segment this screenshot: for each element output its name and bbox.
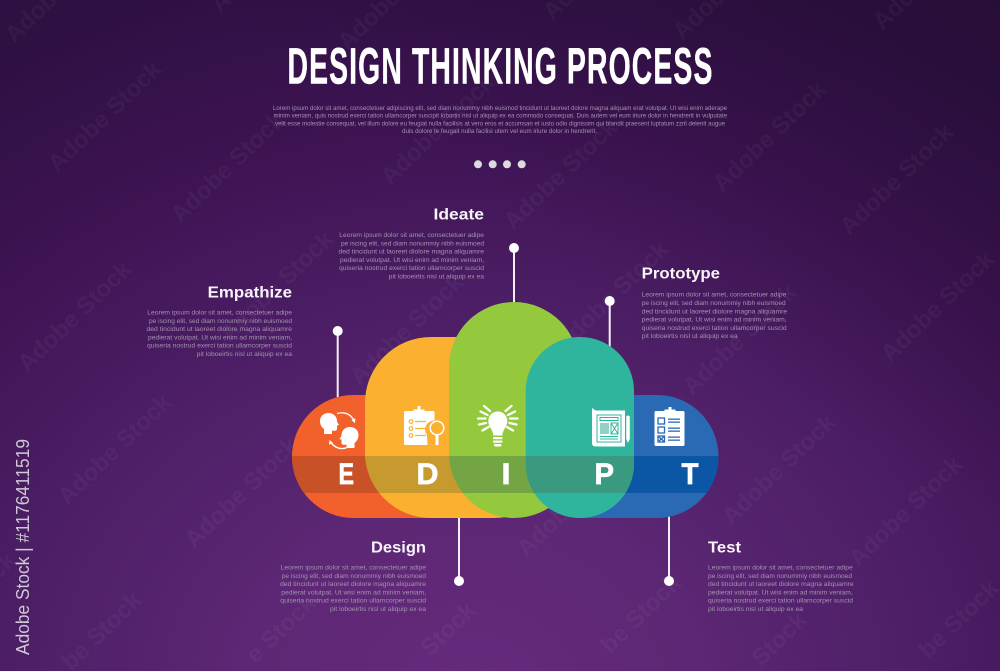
cloud diagram	[292, 302, 718, 518]
text: Empathize: quiseria nostrud exerci tation ullamcorper suscid	[147, 343, 292, 350]
icon: two heads with arrows	[320, 413, 358, 449]
text: Design: Leorem ipsum dolor sit amet, consectetuer adipe	[281, 565, 426, 572]
shape: design orange	[365, 337, 505, 518]
text: Design: pit loboeirtis nisl ut aliquip ex ea	[330, 606, 426, 613]
letter T: T	[682, 458, 698, 491]
text: Test	[708, 565, 854, 613]
watermarks: Adobe Stock	[43, 55, 167, 177]
connector: design	[454, 516, 464, 586]
heading: Ideate: Ideate	[434, 206, 484, 223]
label: Prototype	[642, 266, 787, 340]
shape: empathize red	[292, 395, 430, 518]
text: Test: ded tincidunt ut laoreet diolore magna aliquamre	[708, 581, 854, 588]
text: Test: pedierat volutpat. Ut wisi enim ad minim veniam,	[708, 589, 853, 596]
text: Empathize: ded tincidunt ut laoreet diolore magna aliquamre	[146, 326, 292, 333]
text: Test: quiseria nostrud exerci tation ullamcorper suscid	[708, 598, 853, 605]
watermarks: Adobe Stock	[53, 388, 177, 510]
connector: ideate	[509, 243, 519, 304]
text: Empathize	[146, 310, 292, 358]
letter I: I	[502, 458, 510, 491]
text: Design	[280, 565, 426, 613]
text: Empathize: Leorem ipsum dolor sit amet, consectetuer adipe	[147, 310, 292, 317]
watermarks: Adobe Stock	[717, 408, 841, 530]
watermarks: Adobe Stock	[844, 450, 968, 572]
heading: Design: Design	[371, 539, 426, 556]
letter E: E	[338, 458, 354, 491]
icon: checklist clipboard	[654, 407, 684, 446]
connector: prototype	[605, 296, 615, 350]
heading: Prototype: Prototype	[642, 266, 720, 283]
text: Design: pe iscing elit, sed diam nonummiy nibh euismoed	[282, 573, 426, 580]
text: Empathize: pedierat volutpat. Ut wisi enim ad minim veniam,	[148, 334, 292, 341]
watermarks: Adobe Stock	[499, 113, 623, 235]
shape: test blue	[548, 395, 718, 518]
text: Prototype: pe iscing elit, sed diam nonummiy nibh euismoed	[642, 300, 786, 307]
watermarks: Adobe Stock	[345, 268, 469, 390]
letter P: P	[594, 458, 614, 491]
text: Design: ded tincidunt ut laoreet diolore magna aliquamre	[280, 581, 426, 588]
label: Empathize	[146, 284, 292, 358]
shape: ideate green	[449, 302, 579, 518]
text: Ideate: quiseria nostrud exerci tation ullamcorper suscid	[339, 265, 484, 272]
text: Prototype: pit loboeirtis nisl ut aliquip ex ea	[642, 333, 738, 340]
watermarks: Adobe Stock	[376, 68, 500, 190]
text: Empathize: pit loboeirtis nisl ut aliquip ex ea	[197, 351, 292, 358]
intro paragraph: minim veniam, quis nostrud exerci tation ullamcorper suscipit lobortis nisl ut aliquip ex ea commodo consequat. Duis autem vel eum iriure dolor in hendrerit in vulputate	[274, 113, 727, 120]
watermarks: Adobe Stock	[13, 255, 137, 377]
text: Ideate: pe iscing elit, sed diam nonummiy nibh euismoed	[341, 240, 484, 247]
connector: test	[664, 516, 674, 586]
stock id side text: Adobe Stock | #1176411519	[13, 439, 33, 655]
connector: empathize	[333, 326, 343, 397]
watermarks: Adobe Stock	[708, 75, 832, 197]
icon: blueprint and pencil	[592, 408, 630, 446]
text: Prototype: quiseria nostrud exerci tation ullamcorper suscid	[642, 325, 787, 332]
text: Prototype: Leorem ipsum dolor sit amet, consectetuer adipe	[642, 292, 787, 299]
intro paragraph: velit esse molestie consequat, vel illum dolore eu feugiat nulla facilisis at vero eros et accumsan et iusto odio dignissim qui blandit praesent luptatum zzril delenit augue	[275, 120, 725, 127]
text: Ideate: pit loboeirtis nisl ut aliquip ex ea	[389, 274, 484, 280]
watermarks: Adobe Stock	[512, 440, 636, 562]
intro paragraph	[273, 105, 727, 135]
watermarks: Adobe Stock	[383, 390, 507, 512]
shape: prototype teal	[526, 337, 634, 518]
text: Test: Leorem ipsum dolor sit amet, consectetuer adipe	[708, 565, 853, 572]
label: Test	[708, 539, 854, 613]
watermarks: Stock	[746, 606, 813, 671]
watermarks: e Stock	[241, 589, 322, 669]
watermarks: Adobe Stock	[678, 278, 802, 400]
text: Test: pit loboeirtis nisl ut aliquip ex ea	[708, 606, 803, 613]
text: Prototype: ded tincidunt ut laoreet diolore magna aliquamre	[642, 308, 787, 315]
watermarks: Stock	[415, 596, 482, 662]
watermarks: Adobe Stock	[180, 431, 304, 553]
label: Design	[280, 539, 426, 613]
watermarks: Adobe Stock	[166, 106, 290, 228]
label: Ideate	[338, 206, 484, 280]
pagination dots	[474, 160, 526, 168]
text: Prototype: pedierat volutpat. Ut wisi enim ad minim veniam,	[642, 316, 787, 324]
text: Test: pe iscing elit, sed diam nonummiy nibh euismoed	[708, 573, 852, 580]
text: Ideate: pedierat volutpat. Ut wisi enim ad minim veniam,	[340, 257, 484, 264]
heading: Empathize: Empathize	[208, 284, 292, 301]
intro paragraph: duis dolore te feugait nulla facilisi utem vel eum iriure dolor in hendrerit.	[402, 128, 597, 135]
text: Design: quiseria nostrud exerci tation ullamcorper suscid	[280, 598, 426, 605]
text: Ideate: ded tincidunt ut laoreet diolore magna aliquamre	[338, 249, 484, 256]
icon: light bulb	[478, 406, 518, 446]
watermarks: Adobe Stock	[876, 245, 1000, 367]
heading: Test: Test	[708, 539, 742, 556]
watermarks: be Stock	[595, 569, 687, 659]
watermarks: Adobe Stock	[215, 225, 339, 347]
icon: clipboard with magnifier	[404, 406, 444, 445]
watermarks: Adobe Stock	[550, 235, 674, 357]
letter D: D	[416, 458, 438, 491]
text: Ideate	[338, 232, 484, 280]
intro paragraph: Lorem ipsum dolor sit amet, consectetuer adipiscing elit, sed diam nonummy nibh euismod tincidunt ut laoreet dolore magna aliquam erat volutpat. Ut wisi enim aderape	[273, 105, 727, 112]
text: Design: pedierat volutpat. Ut wisi enim ad minim veniam,	[281, 589, 426, 596]
watermarks: Adobe Stock	[835, 118, 959, 240]
text: Ideate: Leorem ipsum dolor sit amet, consectetuer adipe	[339, 232, 484, 239]
text: Prototype	[642, 292, 787, 340]
text: Empathize: pe iscing elit, sed diam nonummiy nibh euismoed	[149, 318, 292, 325]
